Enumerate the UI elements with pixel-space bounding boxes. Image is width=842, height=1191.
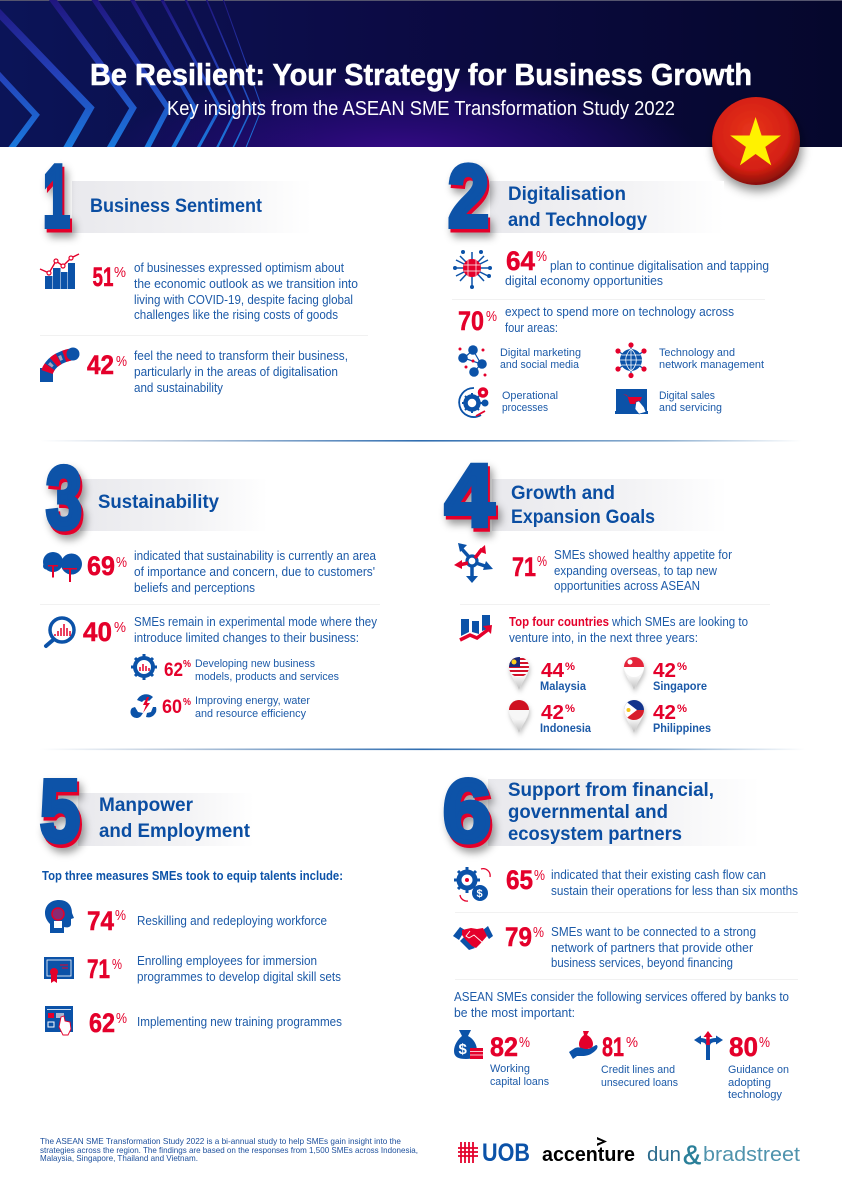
stat: 60%: 60 [162,697,182,718]
numeral 5: 5 [40,761,80,860]
footer note [40,1136,418,1163]
numeral 2: 2 [450,150,491,249]
heading [508,780,714,845]
icon: gears and money [454,867,490,901]
icon: handshake [453,926,493,950]
heading: Business Sentiment [90,196,263,217]
logo: accenture: accenture [542,1144,635,1166]
intro text: Top three measures SMEs took to equip talents include: [42,869,343,883]
text: guidance: Guidance on [728,1064,789,1076]
icon: hand holding money [569,1031,598,1059]
text: operational processes: Operational [502,390,558,402]
stat: 80%: % [759,1034,770,1051]
numeral 5: 5 [42,764,82,864]
stat: 79%: 79 [505,922,532,952]
stat: 81%: % [626,1034,638,1051]
text: credit lines: Credit lines and [601,1064,675,1076]
stat: 82%: 82 [490,1032,518,1062]
heading: and Employment [99,821,251,842]
stat: Malaysia: 44 [541,660,565,682]
stat: Malaysia: % [565,661,575,673]
text: top four countries: venture into, in the next three years: [509,631,698,645]
text: experimental: SMEs remain in experimental mode where they [134,615,378,629]
text: optimism: living with COVID-19, despite facing global [134,293,353,307]
text: optimism: of businesses expressed optimism about [134,261,344,275]
text: optimism [134,261,358,322]
stat: 70%: % [486,308,497,325]
icon: Philippines pin [624,700,644,733]
stat: 42%: % [116,353,127,370]
icon: growth bars and arrow [460,615,492,640]
icon: bar chart with trend line [40,254,79,289]
text: reskilling: Reskilling and redeploying workforce [137,914,327,928]
stat: 40% [83,617,126,647]
heading [508,184,647,231]
stat: Singapore [653,660,707,693]
stat: 79%: % [533,924,544,941]
text: new business models [195,658,339,683]
text: importance: beliefs and perceptions [134,581,255,595]
icon: Indonesia pin [509,700,529,733]
stat: 42%: 42 [87,350,114,380]
icon: transformation arc [40,348,80,382]
panel: 5 Manpower and Employment [40,761,343,1038]
numeral 4: 4 [447,450,496,548]
icon: operational gears [459,388,488,417]
icon: network globe [615,342,647,378]
stat: 40%: % [114,619,126,636]
text: digital sales: Digital sales [659,390,715,402]
icon: magnifier [46,618,74,646]
logo: dun and bradstreet: & [683,1140,701,1170]
text: digitalisation plan [505,259,769,288]
stat: Indonesia: 42 [541,702,564,724]
icon: signpost arrows [694,1031,723,1060]
icon: social network [458,345,487,377]
text: working capital loans [490,1063,549,1088]
stat: Indonesia [540,702,592,735]
heading band [488,779,760,846]
panel: 4 Growth and Expansion Goals [445,446,770,735]
text: training programmes: Implementing new training programmes [137,1015,342,1029]
heading: Expansion Goals [511,507,655,528]
text: immersion programmes: programmes to develop digital skill sets [137,970,341,984]
text: importance: indicated that sustainability is currently an area [134,549,376,563]
text: top four countries: which SMEs are looking to [611,615,748,629]
text: energy efficiency: and resource efficiency [195,708,306,720]
text: working capital loans: Working [490,1063,530,1075]
text: energy efficiency: Improving energy, water [195,695,310,707]
numeral 3: 3 [48,452,84,550]
stat: 65%: 65 [506,865,533,895]
heading band [78,793,254,846]
icon: certificate [44,957,74,983]
stat: 74%: 74 [87,906,114,936]
title: Be Resilient: Your Strategy for Business Growth [90,57,752,92]
stat: 60%: % [183,697,191,708]
text: technology and network [659,347,764,371]
text: guidance: technology [728,1089,782,1101]
text: digital sales [659,390,722,414]
icon: training browser window [45,1006,73,1035]
text: top four countries: Top four countries [509,615,609,629]
footer note: strategies across the region. The findings are based on the responses from 1,500 SMEs across Indonesia, [40,1145,418,1155]
panel: 1 Business Sentiment [40,146,368,395]
footer note: The ASEAN SME Transformation Study 2022 is a bi-annual study to help SMEs gain insight into the [40,1136,401,1146]
text: network of partners: network of partners that provide other [551,941,753,955]
text: technology and network: Technology and [659,347,735,359]
heading: Manpower [99,795,194,816]
stat: 65%: % [534,867,545,884]
text: new business models: models, products and services [195,671,339,683]
stat: Philippines: Philippines [653,723,711,735]
text: cash flow: sustain their operations for less than six months [551,884,798,898]
stat: 40%: 40 [83,617,112,647]
text: technology and network: network management [659,359,764,371]
text: overseas appetite: SMEs showed healthy appetite for [554,548,732,562]
heading: governmental and [508,802,668,823]
stat: Singapore: 42 [653,660,676,682]
stat: Philippines: 42 [653,702,676,724]
heading: Growth and [511,483,615,504]
text: digitalisation plan: digital economy opportunities [505,274,663,288]
logo: dun and bradstreet [647,1140,800,1170]
heading [511,483,655,528]
icon: money bag and coins: $ [458,1041,468,1058]
icon: trees [43,552,82,582]
text: digital marketing: and social media [500,359,580,371]
icon: money bag and coins [454,1030,483,1059]
numeral 1 [43,146,72,249]
text: transform: particularly in the areas of digitalisation [134,365,338,379]
text: digital sales: and servicing [659,402,722,414]
text: importance [134,549,376,595]
text: top four countries [509,615,748,645]
heading band [490,181,724,233]
text: bank services intro: be the most important: [454,1006,575,1020]
heading: Support from financial, [508,780,714,801]
heading [99,795,251,842]
heading band [80,479,268,531]
text: digitalisation plan: plan to continue digitalisation and tapping [550,259,769,273]
text: credit lines: unsecured loans [601,1077,678,1089]
stat: 64%: 64 [506,246,535,276]
stat: Philippines [653,702,711,735]
stat: 62%: 62 [89,1008,115,1038]
numeral 1: 1 [43,146,70,246]
text: overseas appetite [554,548,732,593]
heading: ecosystem partners [508,824,682,845]
numeral 3: 3 [46,448,82,547]
heading: and Technology [508,210,647,231]
icon: Singapore pin [624,657,644,690]
heading: Sustainability [98,492,219,513]
text: transform [134,349,348,395]
text: optimism: challenges like the rising costs of goods [134,308,338,322]
stat: 69%: % [116,554,127,571]
text: technology spend [505,305,734,335]
stat: 51%: % [114,264,126,281]
text: transform: and sustainability [134,381,224,395]
panel: 6 Support from partners [443,761,798,1101]
heading: Digitalisation [508,184,626,205]
text: cash flow: indicated that their existing cash flow can [551,868,766,882]
icon: expansion arrows [454,543,493,583]
stat: Philippines: % [677,703,687,715]
text: optimism: the economic outlook as we transition into [134,277,358,291]
stat: 82%: % [519,1034,530,1051]
stat: Malaysia [540,660,587,693]
text: bank services intro [454,990,789,1020]
icon: Malaysia pin [509,657,529,690]
stat: 69%: 69 [87,551,115,581]
icon: energy cycle [130,694,156,718]
text: cash flow [551,868,798,898]
stat: 64%: % [536,248,547,265]
numeral 1: 1 [45,150,72,249]
header banner [0,0,842,150]
logo: dun and bradstreet: bradstreet [703,1144,800,1166]
heading band [492,479,727,531]
stat: Singapore: % [677,661,687,673]
text: guidance: adopting [728,1077,771,1089]
logo: UOB: UOB [482,1139,530,1167]
stat: 62%: % [116,1010,127,1027]
text: network of partners: business services, beyond financing [551,956,733,970]
numeral 4: 4 [445,446,494,545]
text: digital marketing [500,347,581,371]
stat: 71%: % [112,956,122,973]
text: working capital loans: capital loans [490,1076,549,1088]
stat: Indonesia: Indonesia [540,723,592,735]
text: new business models: Developing new business [195,658,315,670]
stat: 71%: % [537,553,547,570]
icon: gear chart [131,654,157,680]
stat: Singapore: Singapore [653,681,707,693]
subtitle: Key insights from the ASEAN SME Transformation Study 2022 [167,98,675,120]
text: technology spend: expect to spend more on technology across [505,305,734,319]
text: experimental: introduce limited changes to their business: [134,631,359,645]
text: experimental [134,615,378,645]
footer note: Malaysia, Singapore, Thailand and Vietnam. [40,1153,198,1163]
text: energy efficiency [195,695,310,720]
text: credit lines [601,1064,678,1089]
text: overseas appetite: opportunities across ASEAN [554,579,700,593]
text: network of partners [551,925,756,970]
text: network of partners: SMEs want to be connected to a strong [551,925,756,939]
text: importance: of importance and concern, due to customers' [134,565,375,579]
text: transform: feel the need to transform their business, [134,349,348,363]
stat: 70%: 70 [458,306,484,336]
icon: laptop with cart [615,389,648,414]
stat: 62%: % [183,659,191,670]
logo: dun and bradstreet: dun [647,1144,681,1166]
stat: 80%: 80 [729,1032,758,1062]
stat: 74%: % [115,907,126,924]
text: operational processes [502,390,558,414]
numeral 6: 6 [445,764,493,864]
panel: 3 Sustainability [40,448,380,720]
text: overseas appetite: expanding overseas, to tap new [554,564,718,578]
text: immersion programmes [137,954,341,984]
stat: 71%: 71 [512,552,536,582]
logo: UOB [458,1139,530,1167]
icon: gears and money: $ [476,888,483,900]
heading band [72,181,312,233]
text: guidance [728,1064,789,1101]
stat: Indonesia: % [565,703,575,715]
text: operational processes: processes [502,402,548,414]
icon: head with lightbulb [45,900,74,933]
stat: 81%: 81 [602,1032,624,1062]
panel: 2 Digitalisation and Technology [448,146,769,417]
stat: Malaysia: Malaysia [540,681,587,693]
stat: 62%: 62 [164,660,183,681]
stat: 51%: 51 [92,262,114,292]
text: immersion programmes: Enrolling employees for immersion [137,954,317,968]
text: technology spend: four areas: [505,321,558,335]
icon: Vietnam flag badge [712,97,800,185]
numeral 2: 2 [448,146,489,246]
text: bank services intro: ASEAN SMEs consider the following services offered by banks to [454,990,789,1004]
stat: 71%: 71 [87,954,110,984]
icon: digital globe network [453,250,492,289]
numeral 6: 6 [443,761,491,860]
text: digital marketing: Digital marketing [500,347,581,359]
